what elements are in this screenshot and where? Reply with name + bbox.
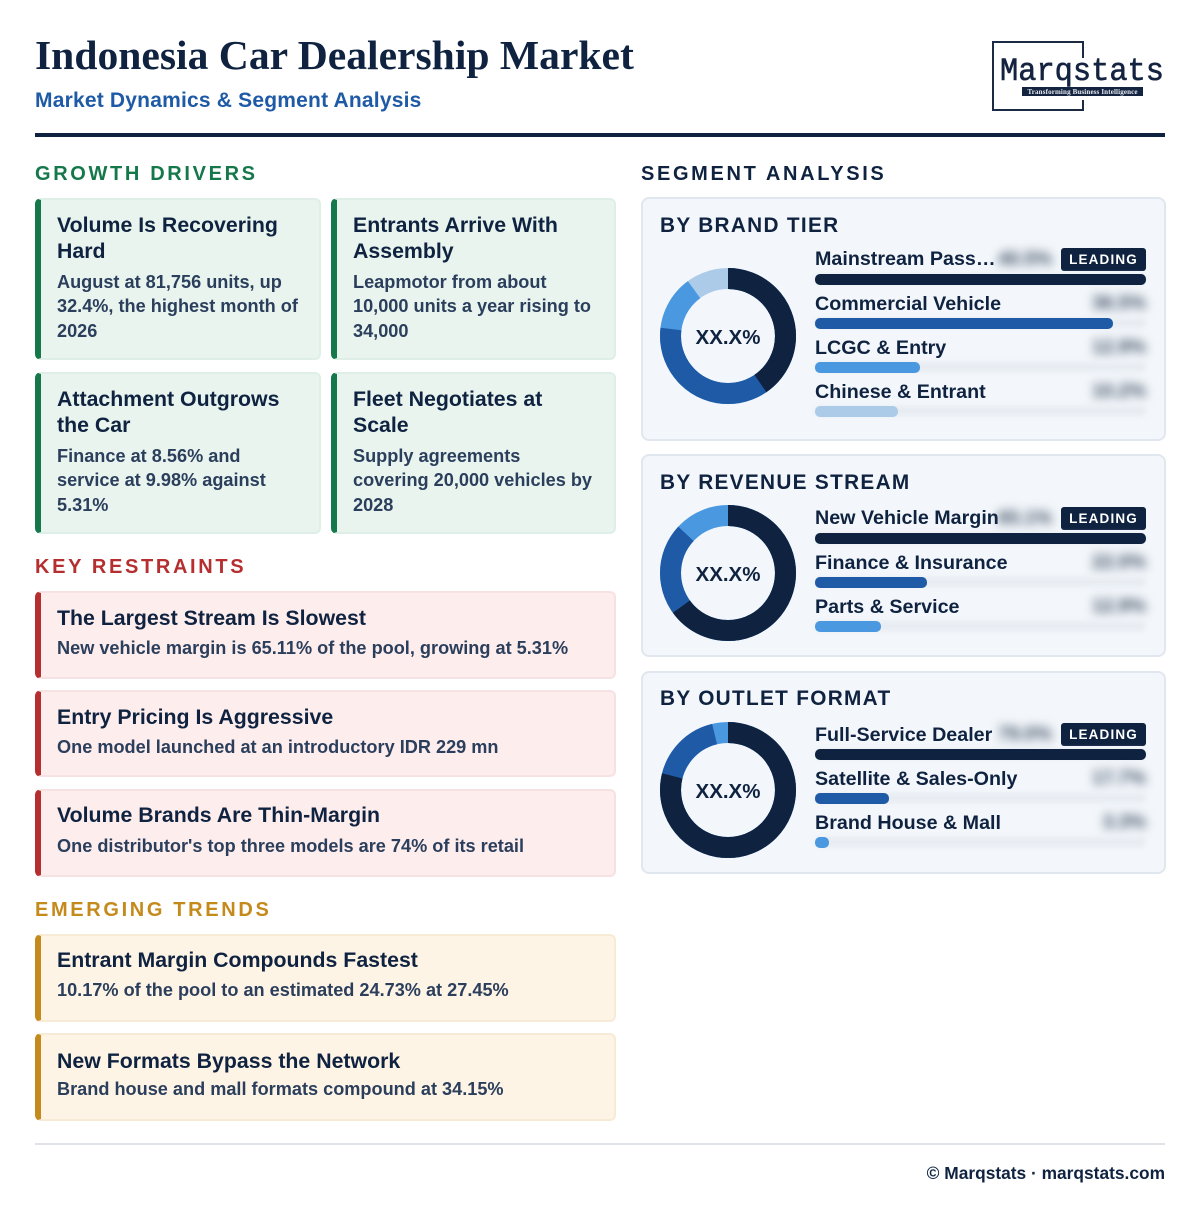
logo: Marqstats	[992, 41, 1164, 111]
card: largest stream	[35, 591, 616, 679]
card: new formats: New Formats Bypass the Network	[57, 1049, 400, 1073]
rows: revenue stream: LEADING	[1069, 511, 1138, 526]
rows: revenue stream: 65.1%	[998, 508, 1052, 529]
card: entry pricing: Entry Pricing Is Aggressive	[57, 705, 333, 729]
heading: segment analysis: SEGMENT ANALYSIS	[641, 163, 886, 185]
rows: outlet format	[815, 720, 1152, 848]
panel: by brand tier	[641, 197, 1166, 441]
heading: by brand tier: BY BRAND TIER	[660, 214, 839, 237]
heading: growth drivers: GROWTH DRIVERS	[35, 163, 258, 185]
card: entry pricing: One model launched at an introductory IDR 229 mn	[57, 737, 498, 757]
logo: Marqstats: Marqstats	[1000, 53, 1164, 90]
card: entrants assembly: Entrants Arrive With	[353, 213, 558, 237]
rows: brand tier: 40.5%	[998, 249, 1052, 270]
rows: revenue stream	[815, 504, 1152, 632]
card: volume recovering	[35, 198, 321, 360]
rows: revenue stream: 22.0%	[1092, 552, 1146, 573]
rows: outlet format: Satellite & Sales-Only	[815, 768, 1017, 790]
card: entrant margin	[35, 934, 616, 1022]
card: entrants assembly	[331, 198, 616, 360]
heading: by revenue stream: BY REVENUE STREAM	[660, 471, 911, 494]
card: attachment outgrows	[35, 372, 321, 534]
rows: brand tier: LCGC & Entry	[815, 337, 946, 359]
card: volume recovering: August at 81,756 units, up	[57, 272, 282, 292]
card: entrants assembly: 10,000 units a year rising to	[353, 296, 591, 316]
rows: brand tier: Mainstream Pass…	[815, 248, 996, 270]
rows: brand tier	[815, 244, 1152, 417]
rows: outlet format: Brand House & Mall	[815, 812, 1001, 834]
card: new formats: Brand house and mall formats compound at 34.15%	[57, 1079, 504, 1099]
rows: outlet format: 17.7%	[1092, 768, 1146, 789]
card: entrant margin: Entrant Margin Compounds Fastest	[57, 948, 418, 972]
card: fleet negotiates: Scale	[353, 412, 409, 436]
card: fleet negotiates: covering 20,000 vehicles by	[353, 470, 592, 490]
card: thin margin	[35, 789, 616, 877]
donut: revenue stream	[660, 505, 796, 641]
subtitle: Market Dynamics & Segment Analysis	[35, 89, 422, 112]
card: fleet negotiates: Fleet Negotiates at	[353, 387, 542, 411]
card: entrants assembly: 34,000	[353, 320, 408, 340]
card: entry pricing	[35, 690, 616, 777]
footer credit: © Marqstats · marqstats.com	[927, 1163, 1165, 1183]
heading: by outlet format: BY OUTLET FORMAT	[660, 687, 891, 710]
card: fleet negotiates	[331, 372, 616, 534]
rows: brand tier: LEADING	[1069, 252, 1138, 267]
card: entrants assembly: Assembly	[353, 238, 454, 262]
card: entrants assembly: Leapmotor from about	[353, 272, 546, 292]
rows: brand tier: Commercial Vehicle	[815, 293, 1001, 315]
card: thin margin: Volume Brands Are Thin-Margin	[57, 803, 380, 827]
rows: outlet format: Full-Service Dealer	[815, 724, 992, 746]
rows: brand tier: 10.2%	[1092, 381, 1146, 402]
rows: outlet format: LEADING	[1069, 727, 1138, 742]
card: largest stream: The Largest Stream Is Slowest	[57, 606, 366, 630]
heading: key restraints: KEY RESTRAINTS	[35, 556, 246, 578]
donut: outlet format	[660, 722, 796, 858]
donut: outlet format: XX.X%	[696, 780, 760, 803]
card: volume recovering: 2026	[57, 320, 97, 340]
title: Indonesia Car Dealership Market	[35, 32, 634, 78]
card: attachment outgrows: service at 9.98% against	[57, 470, 266, 490]
rows: revenue stream: 12.9%	[1092, 596, 1146, 617]
rows: revenue stream: Finance & Insurance	[815, 552, 1008, 574]
card: attachment outgrows: 5.31%	[57, 494, 108, 514]
footer rule	[35, 1143, 1165, 1145]
rows: brand tier: 12.9%	[1092, 337, 1146, 358]
donut: brand tier	[660, 268, 796, 404]
rows: brand tier: 36.5%	[1092, 293, 1146, 314]
card: attachment outgrows: Attachment Outgrows	[57, 387, 279, 411]
donut: brand tier: XX.X%	[696, 326, 760, 349]
panel: by revenue stream	[641, 454, 1166, 657]
card: volume recovering: 32.4%, the highest month of	[57, 296, 298, 316]
heading: emerging trends: EMERGING TRENDS	[35, 899, 271, 921]
card: largest stream: New vehicle margin is 65.11% of the pool, growing at 5.31%	[57, 638, 568, 658]
rows: brand tier: Chinese & Entrant	[815, 381, 986, 403]
card: new formats	[35, 1033, 616, 1121]
panel: by outlet format	[641, 671, 1166, 874]
card: thin margin: One distributor's top three models are 74% of its retail	[57, 836, 524, 856]
card: attachment outgrows: Finance at 8.56% and	[57, 446, 240, 466]
card: volume recovering: Hard	[57, 238, 106, 262]
card: fleet negotiates: Supply agreements	[353, 446, 520, 466]
rows: outlet format: 79.0%	[998, 724, 1052, 745]
donut: revenue stream: XX.X%	[696, 563, 760, 586]
card: volume recovering: Volume Is Recovering	[57, 213, 278, 237]
card: attachment outgrows: the Car	[57, 412, 130, 436]
rows: revenue stream: Parts & Service	[815, 596, 959, 618]
rows: revenue stream: New Vehicle Margin	[815, 507, 999, 529]
card: entrant margin: 10.17% of the pool to an estimated 24.73% at 27.45%	[57, 980, 509, 1000]
rows: outlet format: 3.3%	[1103, 812, 1146, 833]
header rule	[35, 133, 1165, 137]
card: fleet negotiates: 2028	[353, 494, 393, 514]
logo: Marqstats: Transforming Business Intelligence	[1028, 88, 1138, 96]
